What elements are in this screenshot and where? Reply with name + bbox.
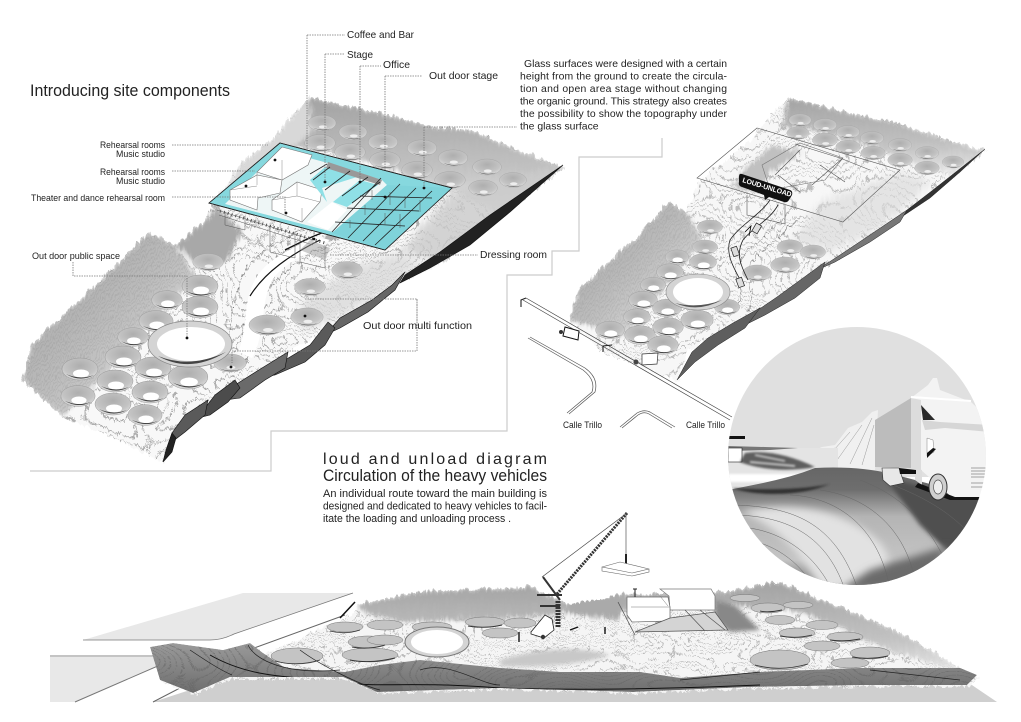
interior floor bbox=[225, 150, 387, 232]
text block: route description: An individual route toward the main building is bbox=[323, 488, 548, 500]
parked truck bbox=[559, 327, 579, 340]
label: dressing room: Dressing room bbox=[480, 249, 547, 261]
glass roof building bbox=[209, 143, 452, 268]
labels: upper components: Office bbox=[383, 59, 410, 71]
tower crane with load bbox=[519, 513, 649, 642]
ground planes bbox=[50, 593, 997, 702]
rear edge: section bbox=[340, 602, 355, 618]
text block: glass surfaces: the glass surface bbox=[520, 122, 599, 132]
heading: loud and unload diagram: loud and unload diagram bbox=[323, 451, 547, 468]
labels: upper components: Coffee and Bar bbox=[347, 29, 414, 41]
text block: glass surfaces: tion and open area stage without changing bbox=[520, 84, 727, 95]
sky bbox=[728, 327, 988, 477]
cliff edge: right terrain bbox=[677, 149, 985, 380]
text block: glass surfaces bbox=[520, 59, 728, 132]
callout badge: loud-unload: LOUD-UNLOAD bbox=[741, 177, 792, 199]
cliff edge: left terrain bbox=[163, 165, 563, 462]
labels: left components: Out door public space bbox=[32, 251, 120, 261]
street plan bbox=[521, 298, 732, 428]
ghost glass outline over right terrain bbox=[697, 128, 900, 224]
text block: route description bbox=[323, 488, 548, 525]
text block: glass surfaces: the organic ground. This strategy also creates bbox=[520, 96, 727, 108]
text block: route description: designed and dedicated to heavy vehicles to facil- bbox=[323, 500, 547, 512]
text block: route description: itate the loading and unloading process . bbox=[323, 513, 511, 525]
text block: glass surfaces: Glass surfaces were designed with a certain bbox=[524, 59, 727, 70]
mountains bbox=[820, 410, 878, 470]
route and trucks bbox=[729, 200, 778, 288]
people and car bbox=[519, 627, 605, 642]
distant ground bbox=[728, 436, 838, 490]
street labels bbox=[563, 420, 725, 430]
terrain: section perspective bbox=[140, 575, 990, 700]
entry truck bbox=[634, 353, 658, 365]
callout frame line bbox=[30, 138, 662, 471]
labels: left components: Music studio bbox=[116, 176, 165, 186]
labels: left components: Rehearsal rooms bbox=[100, 167, 165, 177]
street labels: Calle Trillo bbox=[686, 420, 725, 430]
structural frame below glass bbox=[217, 210, 330, 268]
labels: upper components bbox=[347, 29, 498, 82]
white volumes bbox=[230, 147, 382, 230]
suspended slab bbox=[602, 562, 649, 576]
road bbox=[728, 467, 990, 590]
text block: glass surfaces: the possibility to show the topography under bbox=[520, 109, 728, 120]
labels: upper components: Stage bbox=[347, 49, 373, 61]
text block: glass surfaces: height from the ground to create the circula- bbox=[520, 72, 727, 82]
terrain: circulation plan bbox=[560, 90, 990, 390]
building blocks: section bbox=[618, 589, 728, 635]
labels: upper components: Out door stage bbox=[429, 70, 498, 82]
labels: left components: Music studio bbox=[116, 149, 165, 159]
labels: left components: Theater and dance rehearsal room bbox=[31, 193, 165, 203]
glass plate bbox=[209, 143, 452, 250]
leader lines bbox=[73, 35, 517, 368]
labels: left components: Rehearsal rooms bbox=[100, 140, 165, 150]
heading: circulation: Circulation of the heavy vehicles bbox=[323, 467, 547, 485]
truck on site bbox=[531, 615, 554, 639]
labels: left components bbox=[31, 140, 165, 261]
terrain: site components bbox=[21, 95, 566, 462]
glass grid bbox=[332, 178, 452, 250]
contour lines bbox=[738, 486, 964, 585]
circular perspective view with truck bbox=[728, 327, 990, 590]
title: introducing site components: Introducing site components bbox=[30, 82, 230, 100]
label: out door multi function: Out door multi function bbox=[363, 320, 472, 332]
street labels: Calle Trillo bbox=[563, 420, 602, 430]
truck bbox=[875, 378, 990, 500]
